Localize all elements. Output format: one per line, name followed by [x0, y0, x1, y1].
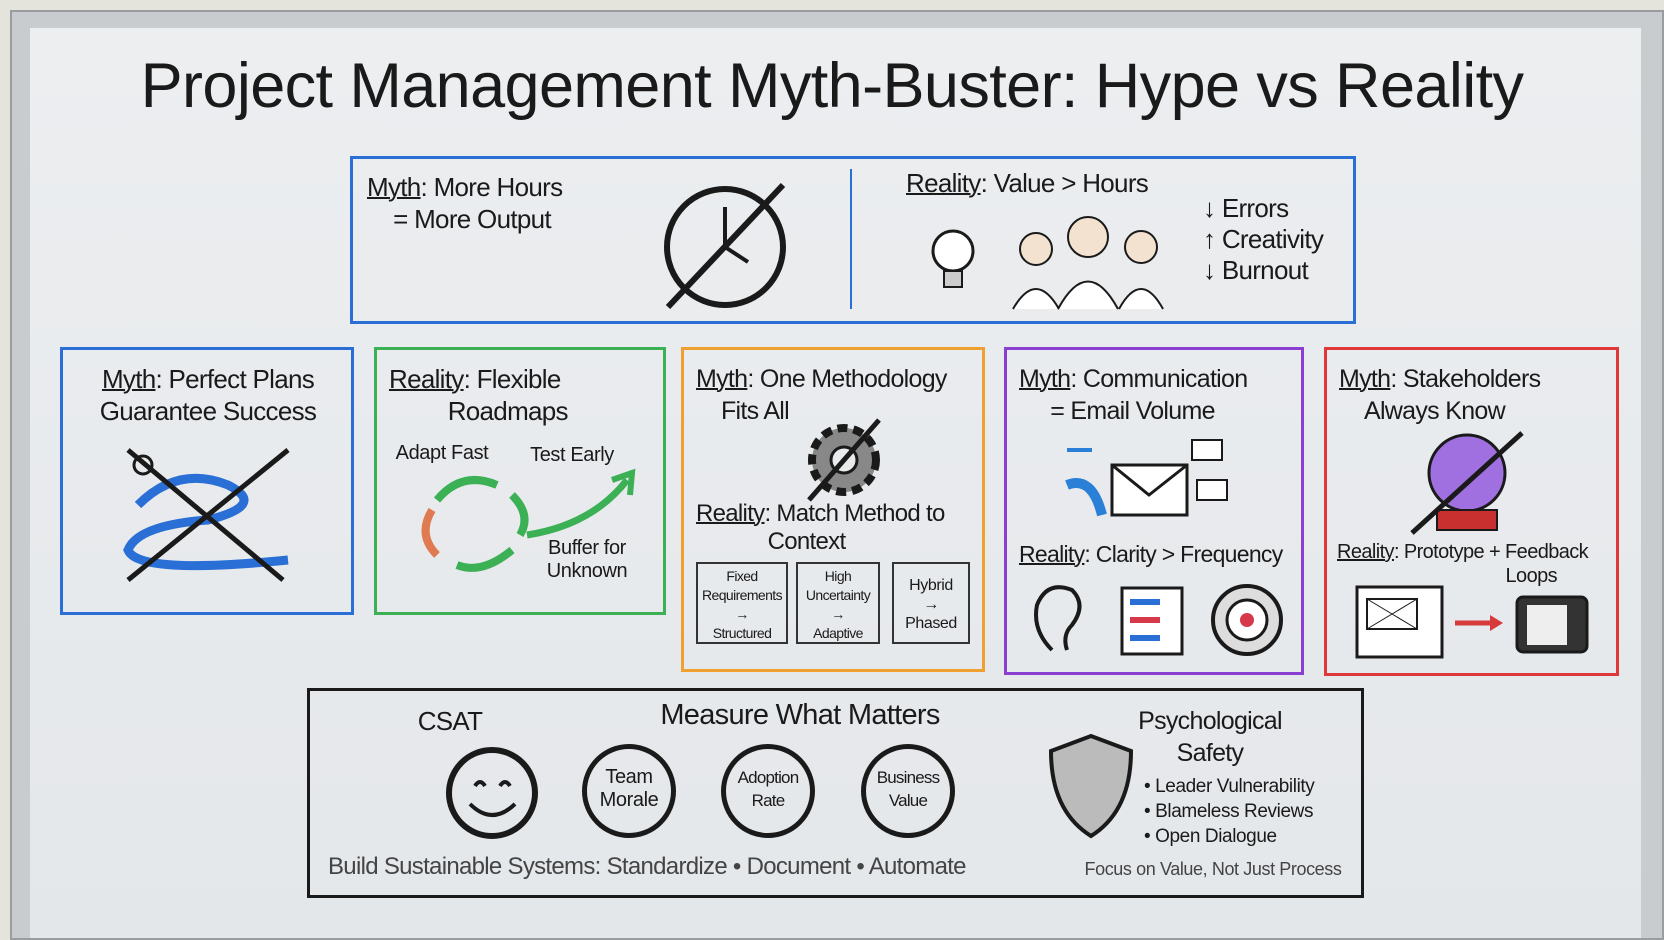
heading	[696, 365, 948, 425]
heading: Myth: Stakeholders	[1339, 365, 1540, 393]
method cards: →	[735, 606, 749, 622]
metric: adoption rate	[721, 744, 815, 838]
heading: Reality: Flexible	[389, 364, 561, 394]
heading	[100, 364, 316, 426]
method cards	[696, 562, 970, 644]
icon: smiley	[446, 747, 538, 839]
method cards: Hybrid	[909, 577, 953, 594]
metric: team morale	[582, 744, 676, 838]
metric: business value	[861, 744, 955, 838]
outcome list	[1203, 193, 1324, 285]
psychological safety: Safety	[1177, 739, 1243, 767]
panel: measure what matters: • Blameless Reviews	[1144, 801, 1313, 822]
reality text: Reality: Match Method to	[696, 500, 945, 527]
panel: perfect plans	[60, 347, 354, 615]
icon: email flood	[1065, 439, 1228, 516]
method cards: High	[825, 568, 851, 584]
outcome list: ↑ Creativity	[1203, 224, 1323, 254]
heading: Always Know	[1364, 397, 1505, 425]
method cards: →	[831, 606, 845, 622]
panel: measure what matters: • Leader Vulnerability	[1144, 776, 1314, 797]
icon: crossed gear	[807, 418, 881, 502]
panel: hours vs value	[350, 156, 1356, 324]
reality text: Context	[768, 528, 845, 555]
icons: ear, list, target	[1034, 584, 1283, 656]
heading	[1339, 365, 1540, 425]
metric: adoption rate: Rate	[752, 791, 784, 810]
metric: team morale: Team	[605, 766, 653, 788]
heading: = Email Volume	[1050, 397, 1215, 425]
reality text: Reality: Prototype + Feedback	[1337, 541, 1588, 563]
method cards: Requirements	[702, 587, 782, 603]
footer left: Build Sustainable Systems: Standardize • Document • Automate	[328, 853, 966, 880]
panel: stakeholders	[1324, 347, 1619, 676]
metric: business value: Value	[889, 791, 927, 810]
reality text: Reality: Clarity > Frequency	[1019, 541, 1283, 567]
footer right: Focus on Value, Not Just Process	[1084, 859, 1342, 879]
method cards: Uncertainty	[806, 587, 870, 603]
method cards: →	[923, 596, 939, 613]
CSAT label: CSAT	[418, 706, 482, 736]
icon: cycle arrows	[421, 468, 636, 572]
divider	[850, 169, 852, 309]
icon: wireframe to device	[1356, 586, 1588, 658]
metric: team morale: Morale	[600, 789, 658, 811]
outcome list: ↓ Burnout	[1203, 255, 1308, 285]
reality text: Loops	[1506, 565, 1557, 587]
buffer text: Unknown	[547, 560, 627, 582]
icon: crossed route	[123, 448, 290, 582]
panel: methodology	[681, 347, 985, 672]
title: Project Management Myth-Buster: Hype vs Reality	[141, 51, 1523, 121]
icon: crossed crystal ball	[1410, 431, 1524, 535]
panel: flexible roadmaps: Test Early	[530, 444, 614, 466]
reality text: Reality: Value > Hours	[906, 168, 1148, 198]
heading: Measure What Matters	[660, 699, 940, 731]
metric: adoption rate: Adoption	[738, 768, 798, 787]
heading: Myth: Perfect Plans	[102, 364, 314, 394]
outcome list: ↓ Errors	[1203, 193, 1288, 223]
method cards: Phased	[905, 615, 957, 632]
psychological safety	[1138, 707, 1282, 767]
method cards: Adaptive	[813, 625, 863, 641]
buffer text	[547, 537, 627, 582]
method cards: Fixed	[726, 568, 758, 584]
panel: measure what matters	[307, 688, 1364, 898]
heading: Roadmaps	[448, 396, 568, 426]
heading	[1019, 365, 1247, 425]
heading: Myth: Communication	[1019, 365, 1247, 393]
buffer text: Buffer for	[548, 537, 626, 559]
heading	[389, 364, 568, 426]
metric: business value: Business	[877, 768, 939, 787]
labels: Adapt Fast	[396, 442, 488, 464]
icon: bulb and team	[932, 216, 1164, 310]
myth text	[367, 172, 562, 234]
reality text	[696, 500, 945, 555]
icon: shield	[1049, 734, 1133, 838]
panel: communication	[1004, 347, 1304, 675]
method cards: Structured	[713, 625, 771, 641]
myth text: = More Output	[393, 204, 551, 234]
heading: Guarantee Success	[100, 396, 316, 426]
psychological safety: Psychological	[1138, 707, 1282, 735]
panel: measure what matters: • Open Dialogue	[1144, 826, 1277, 847]
panel: flexible roadmaps	[374, 347, 666, 615]
icon: crossed clock	[664, 183, 786, 309]
reality text	[1337, 541, 1589, 587]
heading: Fits All	[721, 397, 789, 425]
myth text: Myth: More Hours	[367, 172, 562, 202]
heading: Myth: One Methodology	[696, 365, 947, 393]
